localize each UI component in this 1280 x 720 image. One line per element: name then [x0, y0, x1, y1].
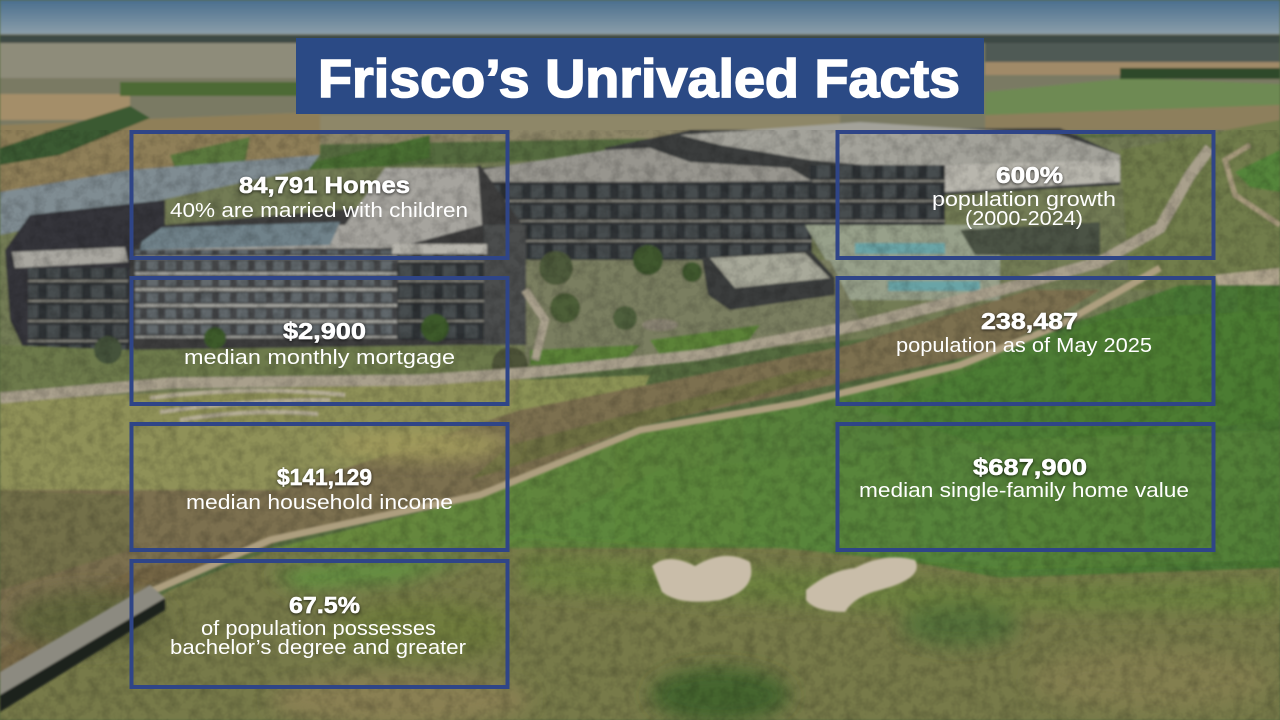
stat: growth: 600% — [996, 162, 1063, 188]
description: mortgage: median monthly mortgage — [184, 347, 455, 369]
lawn strip below left building — [0, 345, 530, 395]
rough band — [0, 290, 1100, 650]
stat: income: $141,129 — [277, 464, 372, 490]
description: income: median household income — [186, 492, 453, 514]
description: growth years: (2000-2024) — [965, 208, 1083, 230]
mid-ground base — [0, 130, 1280, 420]
tan road — [0, 148, 1210, 398]
left main building — [130, 165, 525, 350]
central building — [480, 160, 812, 262]
bottom rough — [0, 548, 1280, 720]
stat: population: 238,487 — [981, 308, 1078, 334]
fairway — [275, 285, 1280, 578]
stat: homes: 84,791 Homes — [239, 172, 410, 198]
panel: homes — [132, 132, 508, 258]
stat: home value: $687,900 — [973, 454, 1087, 480]
river — [0, 155, 320, 238]
left shore — [0, 112, 320, 195]
blurred rough patches — [10, 430, 1280, 720]
description: home value: median single-family home value — [859, 480, 1189, 502]
panel: education — [132, 561, 508, 687]
far-left wing — [5, 200, 165, 362]
title banner — [296, 38, 984, 114]
cart path — [150, 268, 1160, 592]
panel: home value — [838, 424, 1214, 550]
description: education: of population possesses — [201, 618, 436, 640]
panel: mortgage — [132, 278, 508, 404]
bunker right — [806, 557, 917, 612]
amphitheatre — [150, 391, 345, 420]
meadow left — [0, 378, 620, 490]
title: Frisco’s Unrivaled Facts — [318, 49, 960, 109]
back building right — [605, 128, 1120, 235]
panel: income — [132, 424, 508, 550]
stat: education: 67.5% — [289, 592, 360, 618]
description: education line 2: bachelor’s degree and greater — [170, 637, 466, 659]
far right golf & path — [1120, 120, 1280, 290]
description: homes: 40% are married with children — [170, 200, 468, 222]
panel: population — [838, 278, 1214, 404]
description: growth: population growth — [932, 189, 1116, 211]
panel: growth — [838, 132, 1214, 258]
description: population: population as of May 2025 — [896, 335, 1152, 357]
pool deck right — [805, 225, 1000, 300]
courtyard — [525, 260, 860, 365]
boardwalk — [0, 585, 165, 712]
small pavilion — [702, 250, 835, 310]
bunker left — [652, 556, 751, 602]
stat: mortgage: $2,900 — [283, 318, 366, 344]
